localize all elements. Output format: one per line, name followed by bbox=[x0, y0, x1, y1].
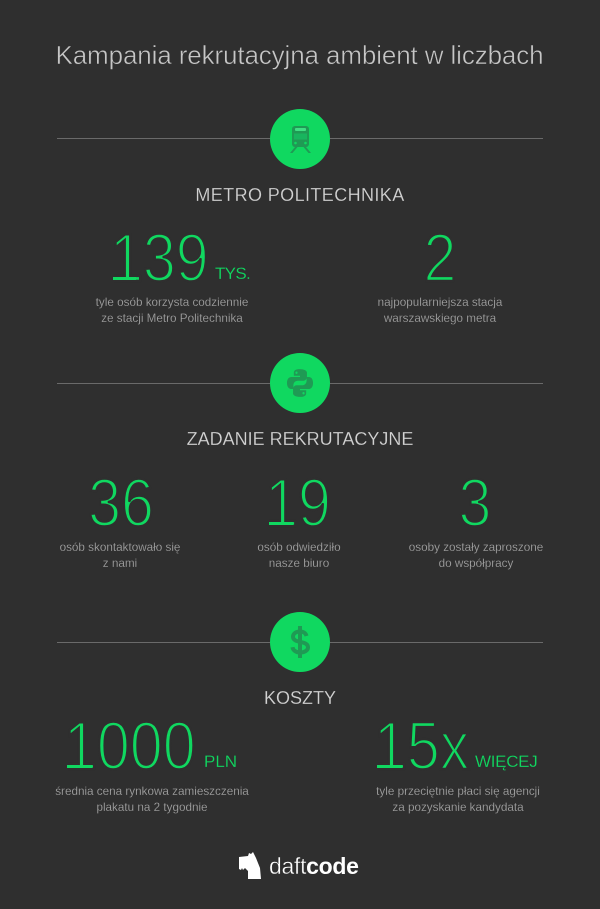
heading: Metro Politechnika: METRO POLITECHNIKA bbox=[195, 185, 405, 205]
stat: 19: 19 bbox=[265, 465, 331, 541]
unit: tys.: TYS. bbox=[215, 264, 250, 283]
description: 3: do współpracy bbox=[439, 557, 513, 570]
description: 1000 PLN bbox=[55, 785, 249, 814]
description: 15x więcej: za pozyskanie kandydata bbox=[392, 801, 524, 814]
wordmark: daftcode bbox=[269, 853, 359, 879]
stat: 36: 36 bbox=[88, 465, 154, 541]
description: 36: z nami bbox=[103, 557, 137, 570]
icon: dollar bbox=[270, 612, 330, 672]
icon: dog head bbox=[239, 852, 261, 879]
description: 19: nasze biuro bbox=[269, 557, 329, 570]
icon: train bbox=[270, 109, 330, 169]
description: 3: osoby zostały zaproszone bbox=[409, 541, 543, 554]
stat: 2: 2 bbox=[424, 220, 456, 296]
description: 139 tys.: ze stacji Metro Politechnika bbox=[101, 312, 243, 325]
description: 139 tys.: tyle osób korzysta codziennie bbox=[96, 296, 248, 309]
description: 19 bbox=[257, 541, 341, 570]
description: 36: osób skontaktowało się bbox=[60, 541, 180, 554]
description: 2 bbox=[378, 296, 502, 325]
description: 15x więcej: tyle przeciętnie płaci się agencji bbox=[376, 785, 540, 798]
icon: python bbox=[270, 353, 330, 413]
unit: PLN: PLN bbox=[204, 752, 237, 771]
logo: daftcode bbox=[239, 852, 359, 879]
unit: więcej: WIĘCEJ bbox=[475, 752, 537, 771]
stat: 3: 3 bbox=[459, 465, 491, 541]
stat: 139 tys.: 139 bbox=[110, 220, 209, 296]
description: 15x więcej bbox=[376, 785, 540, 814]
description: 19: osób odwiedziło bbox=[257, 541, 341, 554]
heading: Zadanie rekrutacyjne: ZADANIE REKRUTACYJNE bbox=[187, 429, 413, 449]
description: 1000 PLN: średnia cena rynkowa zamieszczenia bbox=[55, 785, 249, 798]
description: 36 bbox=[60, 541, 180, 570]
title: Kampania rekrutacyjna ambient w liczbach bbox=[56, 40, 544, 70]
stat: 1000 PLN: 1000 bbox=[64, 708, 196, 784]
description: 139 tys. bbox=[96, 296, 248, 325]
description: 3 bbox=[409, 541, 543, 570]
heading: Koszty: KOSZTY bbox=[264, 688, 336, 708]
stat: 15x więcej: 15x bbox=[374, 708, 469, 784]
description: 2: warszawskiego metra bbox=[384, 312, 496, 325]
description: 2: najpopularniejsza stacja bbox=[378, 296, 502, 309]
description: 1000 PLN: plakatu na 2 tygodnie bbox=[96, 801, 208, 814]
